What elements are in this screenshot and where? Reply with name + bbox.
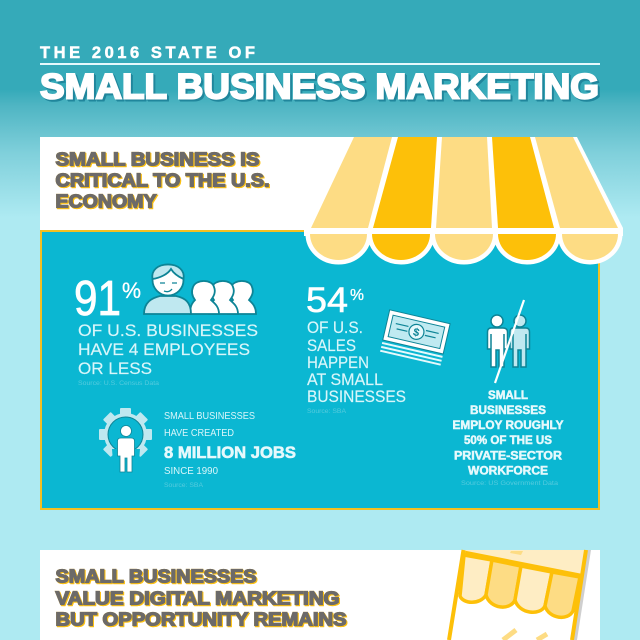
icon: money stack: $ bbox=[412, 326, 421, 339]
stat: 50 percent of workforce: Source: US Government Data bbox=[461, 481, 559, 487]
panel: small business is critical bbox=[40, 137, 623, 509]
icon: gear with person bbox=[99, 408, 152, 475]
stat: 50 percent of workforce: 50% OF THE US bbox=[464, 435, 552, 447]
panel: digital marketing bbox=[40, 550, 600, 640]
stat: 54 percent: HAPPEN bbox=[307, 353, 369, 372]
heading: critical to the economy: CRITICAL TO THE U.S. bbox=[56, 170, 270, 190]
title: SMALL BUSINESS MARKETING bbox=[40, 68, 599, 106]
stat: 54 percent: 54 bbox=[306, 281, 348, 320]
stat: 54 percent: % bbox=[350, 287, 364, 304]
stat: 54 percent: BUSINESSES bbox=[307, 387, 406, 406]
stat: 91 percent bbox=[74, 264, 258, 387]
icon: mobile storefront bbox=[449, 550, 591, 640]
header bbox=[40, 44, 600, 106]
stat: 54 percent: OF U.S. bbox=[307, 318, 363, 337]
stat: 8 million jobs bbox=[99, 408, 296, 489]
heading: value digital marketing bbox=[56, 566, 346, 630]
stat: 54 percent: Source: SBA bbox=[307, 409, 346, 415]
heading: critical to the economy: SMALL BUSINESS IS bbox=[56, 150, 260, 170]
icon: money stack bbox=[380, 310, 450, 366]
stat: 50 percent of workforce bbox=[452, 300, 564, 487]
heading: critical to the economy bbox=[56, 150, 270, 212]
stat: 91 percent: Source: U.S. Census Data bbox=[78, 381, 160, 387]
heading: critical to the economy: ECONOMY bbox=[56, 192, 156, 212]
stat: 54 percent bbox=[306, 281, 450, 415]
stat: 8 million jobs: Source: SBA bbox=[164, 483, 203, 489]
kicker: the 2016 state of: THE 2016 STATE OF bbox=[40, 44, 255, 62]
stat: 91 percent: OR LESS bbox=[78, 359, 152, 378]
stat: 8 million jobs: HAVE CREATED bbox=[164, 427, 234, 439]
heading: value digital marketing: VALUE DIGITAL MARKETING bbox=[56, 588, 340, 608]
heading: value digital marketing: SMALL BUSINESSES bbox=[56, 566, 256, 586]
stat: 54 percent: SALES bbox=[307, 336, 356, 355]
heading: value digital marketing: BUT OPPORTUNITY REMAINS bbox=[56, 610, 346, 630]
stat: 50 percent of workforce: SMALL bbox=[488, 390, 528, 402]
stat: 91 percent: % bbox=[122, 278, 141, 303]
stat: 8 million jobs: SMALL BUSINESSES bbox=[164, 410, 255, 422]
icon: shop awning bbox=[304, 137, 623, 260]
icon: split people bbox=[488, 300, 530, 383]
stat: 8 million jobs: 8 MILLION JOBS bbox=[164, 444, 296, 462]
stat: 50 percent of workforce: PRIVATE-SECTOR bbox=[454, 450, 563, 462]
stat: 50 percent of workforce: EMPLOY ROUGHLY bbox=[452, 420, 564, 432]
text: of U.S. businesses: OF U.S. BUSINESSES bbox=[78, 321, 258, 340]
stat: 91 percent: 91 bbox=[74, 272, 121, 326]
stat: 91 percent: HAVE 4 EMPLOYEES bbox=[78, 340, 250, 359]
stat: 50 percent of workforce: BUSINESSES bbox=[470, 405, 546, 417]
stat: 54 percent: AT SMALL bbox=[307, 370, 383, 389]
icon: four people bbox=[144, 264, 256, 314]
stat: 8 million jobs: SINCE 1990 bbox=[164, 465, 218, 477]
stat: 50 percent of workforce: WORKFORCE bbox=[468, 466, 548, 478]
